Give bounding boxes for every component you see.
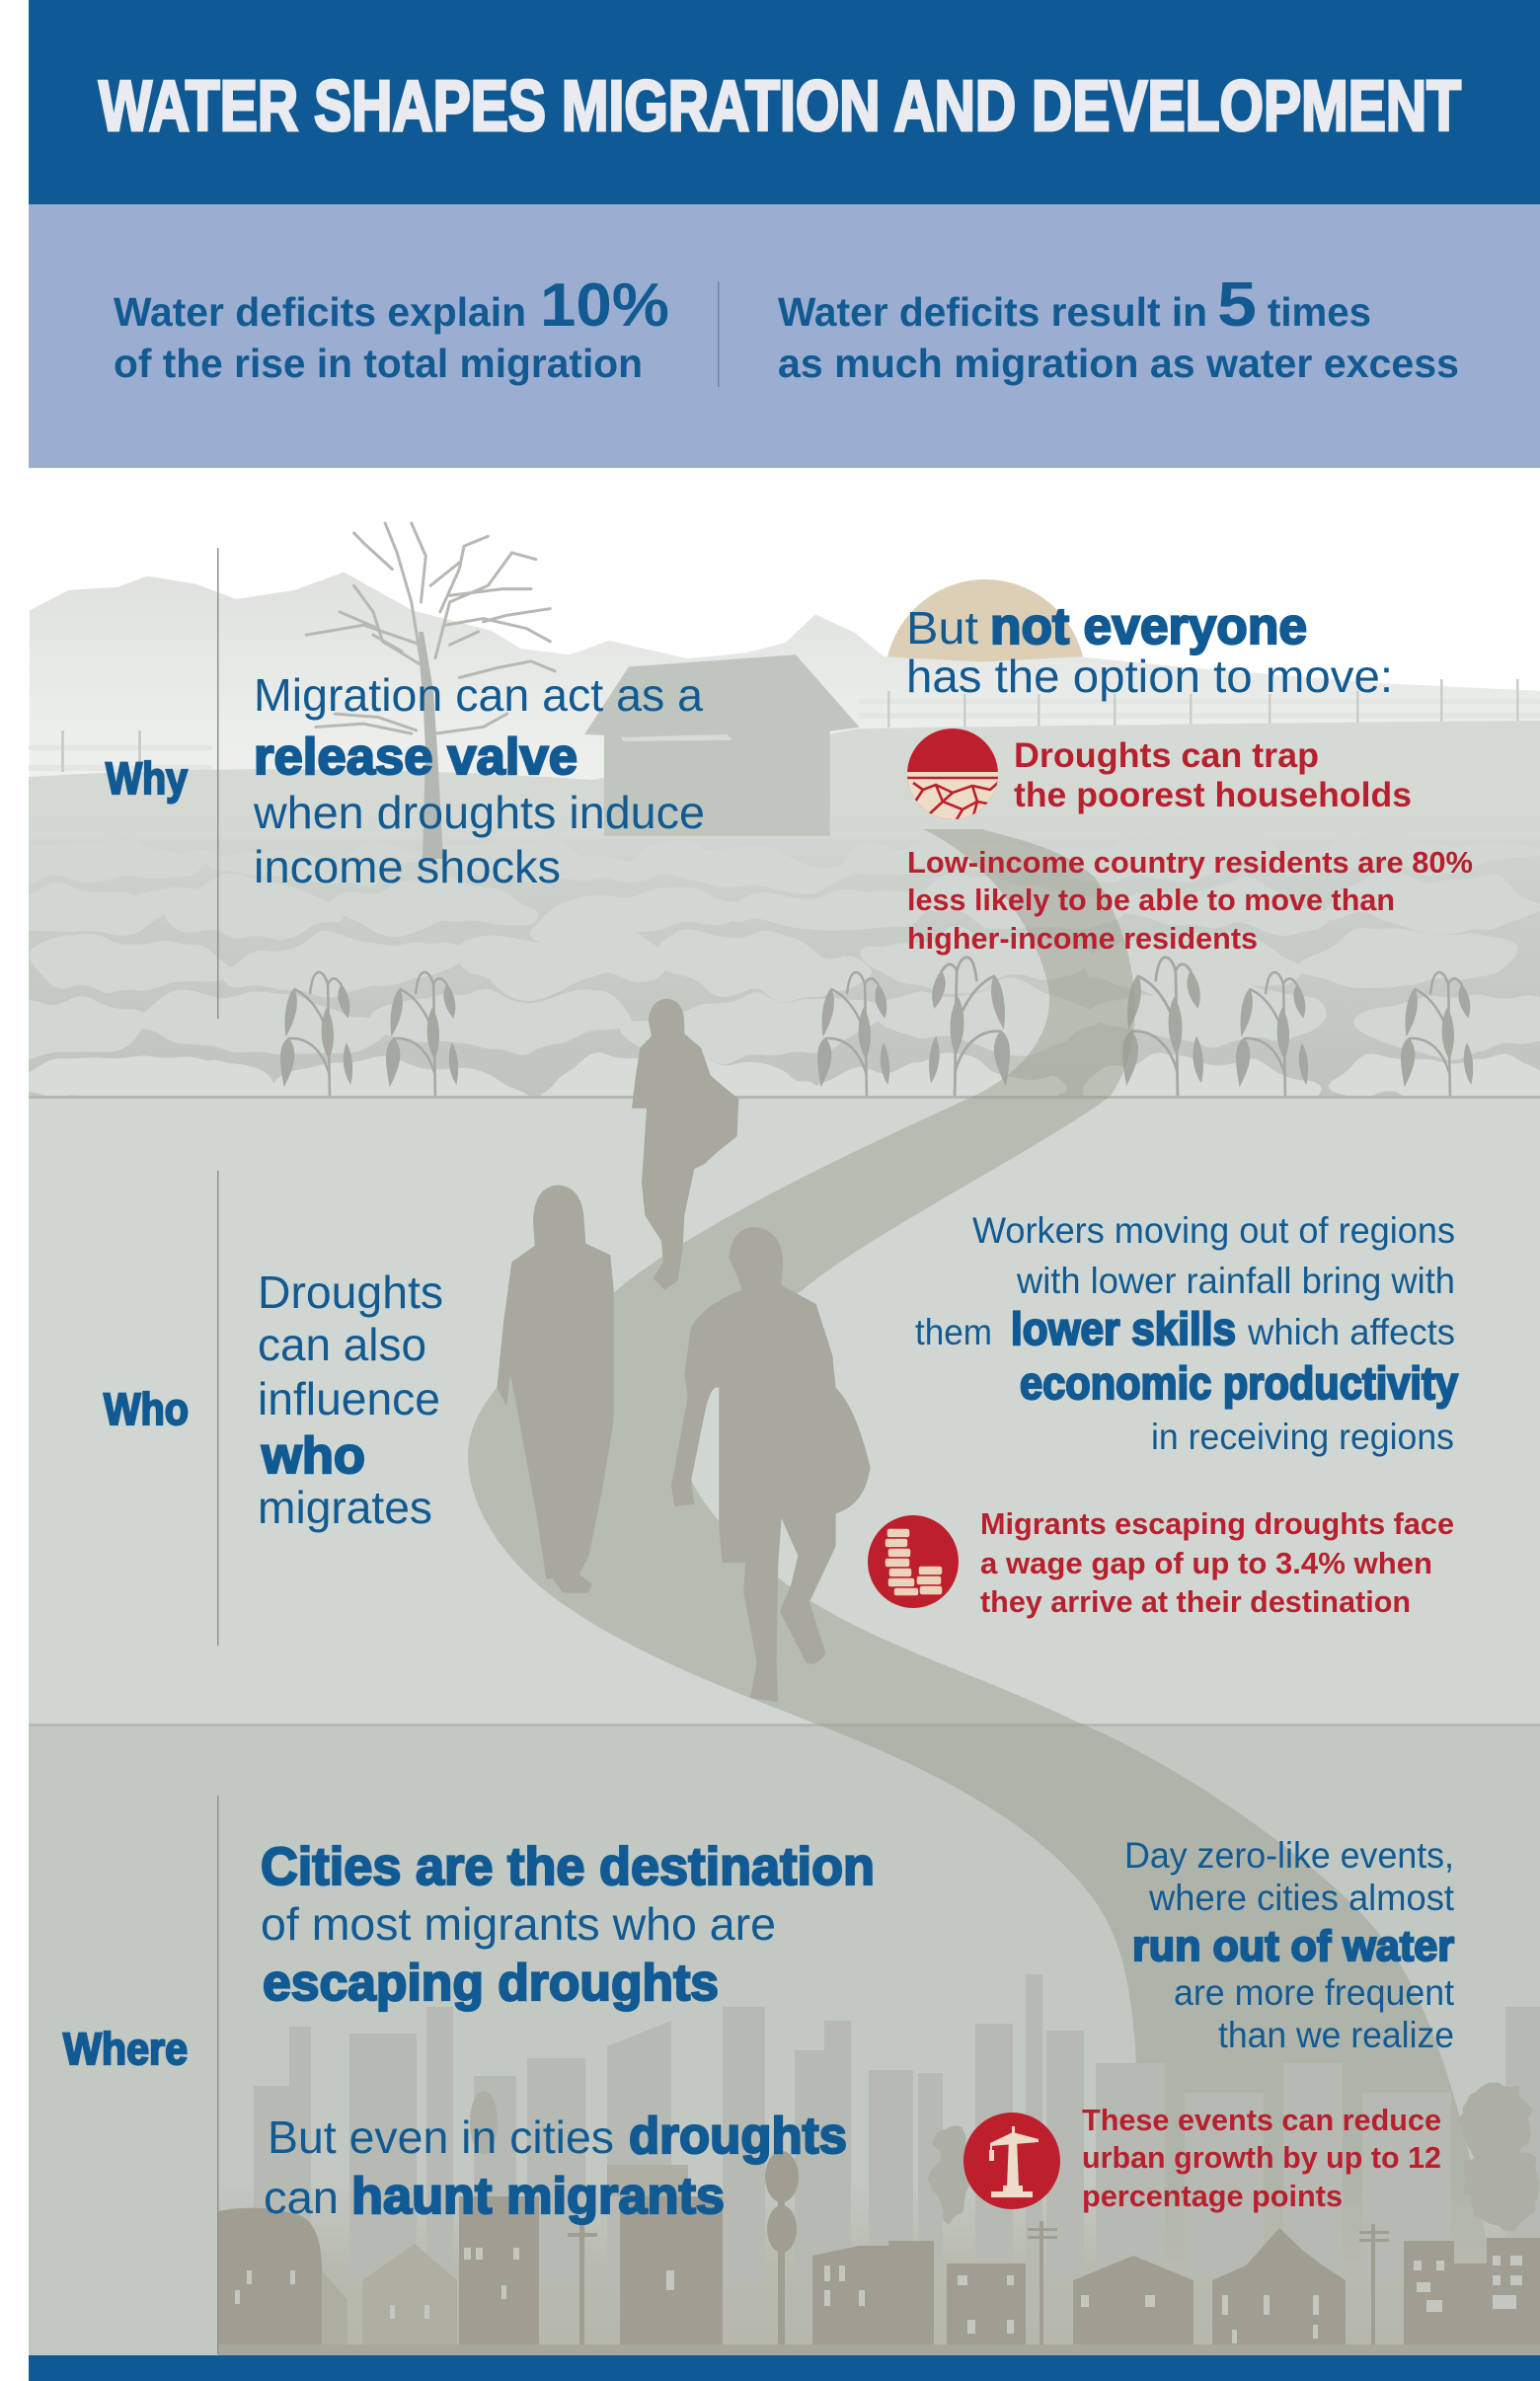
text: not everyone can move: has the option to move: bbox=[906, 651, 1393, 702]
text: droughts can haunt migrants: can bbox=[264, 2172, 339, 2223]
text: lower skills: which affects bbox=[1247, 1312, 1455, 1352]
text: urban growth: These events can reduce bbox=[1082, 2103, 1441, 2137]
corn plants bbox=[281, 958, 1472, 1098]
text: day zero events: are more frequent bbox=[1174, 1972, 1455, 2013]
panel: where bbox=[29, 1726, 1540, 2355]
statistic: 5 times as much migration bbox=[778, 269, 1459, 386]
text: urban growth: percentage points bbox=[1082, 2179, 1343, 2213]
text: release valve: Migration can act as a bbox=[254, 669, 703, 721]
text: cities are the destination: of most migrants who are bbox=[261, 1898, 776, 1950]
icon: coin stacks bbox=[868, 1515, 959, 1608]
person: man with bag bbox=[671, 1227, 871, 1703]
text: not everyone can move bbox=[906, 598, 1393, 702]
label: who: Who bbox=[104, 1384, 189, 1434]
text: lower skills: economic productivity bbox=[1020, 1357, 1458, 1409]
sun bbox=[887, 579, 1083, 661]
text: cities are the destination: escaping droughts bbox=[263, 1955, 719, 2012]
bottom band bbox=[29, 2355, 1540, 2381]
text: droughts can trap: the poorest households bbox=[1014, 776, 1412, 814]
text: droughts can trap bbox=[1014, 736, 1412, 814]
cracked earth bbox=[29, 884, 1540, 1096]
statistic: water deficits explain 10% bbox=[114, 271, 669, 386]
back skyline bbox=[218, 1974, 1540, 2355]
text: droughts influence who migrates: Droughts bbox=[258, 1267, 443, 1318]
text: release valve: when droughts induce bbox=[253, 787, 705, 838]
statistic: water deficits explain 10%: of the rise in total migration bbox=[114, 341, 643, 386]
text: not everyone can move: But bbox=[906, 602, 978, 653]
ground bbox=[29, 721, 1540, 839]
text: urban growth: urban growth by up to 12 bbox=[1082, 2140, 1441, 2175]
text: wage gap: a wage gap of up to 3.4% when bbox=[980, 1546, 1432, 1580]
text: not everyone can move: not everyone bbox=[990, 598, 1307, 655]
text: day zero events: than we realize bbox=[1218, 2015, 1454, 2055]
dead tree bbox=[306, 523, 555, 859]
statistic: 5 times as much migration: Water deficits result in bbox=[778, 289, 1207, 335]
text: wage gap: Migrants escaping droughts face bbox=[980, 1506, 1454, 1541]
front city skyline bbox=[218, 2151, 1540, 2355]
text: low-income residents: higher-income residents bbox=[907, 921, 1258, 956]
text: lower skills: lower skills bbox=[1011, 1303, 1236, 1354]
text: day zero events bbox=[1124, 1835, 1455, 2055]
text: lower skills: Workers moving out of regions bbox=[972, 1210, 1455, 1251]
text: low-income residents: less likely to be able to move than bbox=[907, 883, 1395, 917]
header band bbox=[29, 0, 1540, 204]
label: why: Why bbox=[106, 753, 188, 804]
statistic: water deficits explain 10%: Water deficits explain bbox=[114, 289, 526, 335]
text: droughts influence who migrates: who bbox=[261, 1427, 365, 1485]
panel: who bbox=[29, 1098, 1540, 1726]
label: where: Where bbox=[63, 2024, 188, 2074]
vertical rules bbox=[217, 548, 219, 2354]
text: droughts influence who migrates: can also bbox=[258, 1319, 426, 1370]
text: lower skills bbox=[915, 1210, 1458, 1457]
person: woman bbox=[497, 1186, 614, 1593]
text: droughts can haunt migrants: But even in cities bbox=[268, 2112, 614, 2163]
statistic: water deficits explain 10%: 10% bbox=[540, 271, 669, 340]
text: day zero events: run out of water bbox=[1132, 1922, 1454, 1970]
text: droughts can haunt migrants: droughts bbox=[629, 2108, 847, 2165]
migrants silhouettes bbox=[497, 999, 871, 1703]
text: release valve: release valve bbox=[254, 729, 578, 786]
person: far walker bbox=[632, 999, 738, 1290]
winding road bbox=[468, 829, 1491, 2270]
text: cities are the destination: Cities are the destination bbox=[261, 1837, 875, 1896]
text: droughts influence who migrates: influence bbox=[258, 1373, 440, 1424]
text: wage gap bbox=[980, 1506, 1454, 1619]
statistic: 5 times as much migration: 5 bbox=[1217, 269, 1257, 340]
statistic: 5 times as much migration: times bbox=[1268, 289, 1371, 335]
panel: key statistics bbox=[29, 204, 1540, 468]
text: release valve: income shocks bbox=[254, 841, 561, 892]
text: droughts can haunt migrants: haunt migrants bbox=[351, 2168, 725, 2225]
text: low-income residents: Low-income country residents are 80% bbox=[907, 845, 1473, 880]
statistic: 5 times as much migration: as much migration as water excess bbox=[778, 341, 1459, 386]
text: droughts influence who migrates bbox=[258, 1267, 443, 1533]
text: urban growth bbox=[1082, 2103, 1441, 2213]
text: droughts can trap: Droughts can trap bbox=[1014, 736, 1319, 775]
text: lower skills: them bbox=[915, 1312, 992, 1352]
text: lower skills: in receiving regions bbox=[1151, 1417, 1454, 1457]
text: wage gap: they arrive at their destination bbox=[980, 1584, 1411, 1619]
text: low-income residents bbox=[907, 845, 1473, 956]
text: droughts influence who migrates: migrates bbox=[258, 1482, 432, 1533]
text: day zero events: where cities almost bbox=[1148, 1878, 1455, 1918]
panel: why bbox=[0, 523, 1540, 1114]
lit windows bbox=[235, 2248, 1522, 2343]
icon: cracked earth bbox=[907, 729, 998, 819]
text: day zero events: Day zero-like events, bbox=[1124, 1835, 1454, 1876]
text: droughts can haunt migrants bbox=[264, 2108, 847, 2225]
fences bbox=[29, 679, 1540, 772]
text: cities are the destination bbox=[261, 1837, 875, 2012]
drought landscape illustration bbox=[0, 523, 1540, 1114]
text: release valve bbox=[253, 669, 705, 892]
icon: idle crane bbox=[963, 2112, 1060, 2209]
text: lower skills: with lower rainfall bring with bbox=[1016, 1261, 1455, 1301]
barn bbox=[584, 654, 860, 836]
